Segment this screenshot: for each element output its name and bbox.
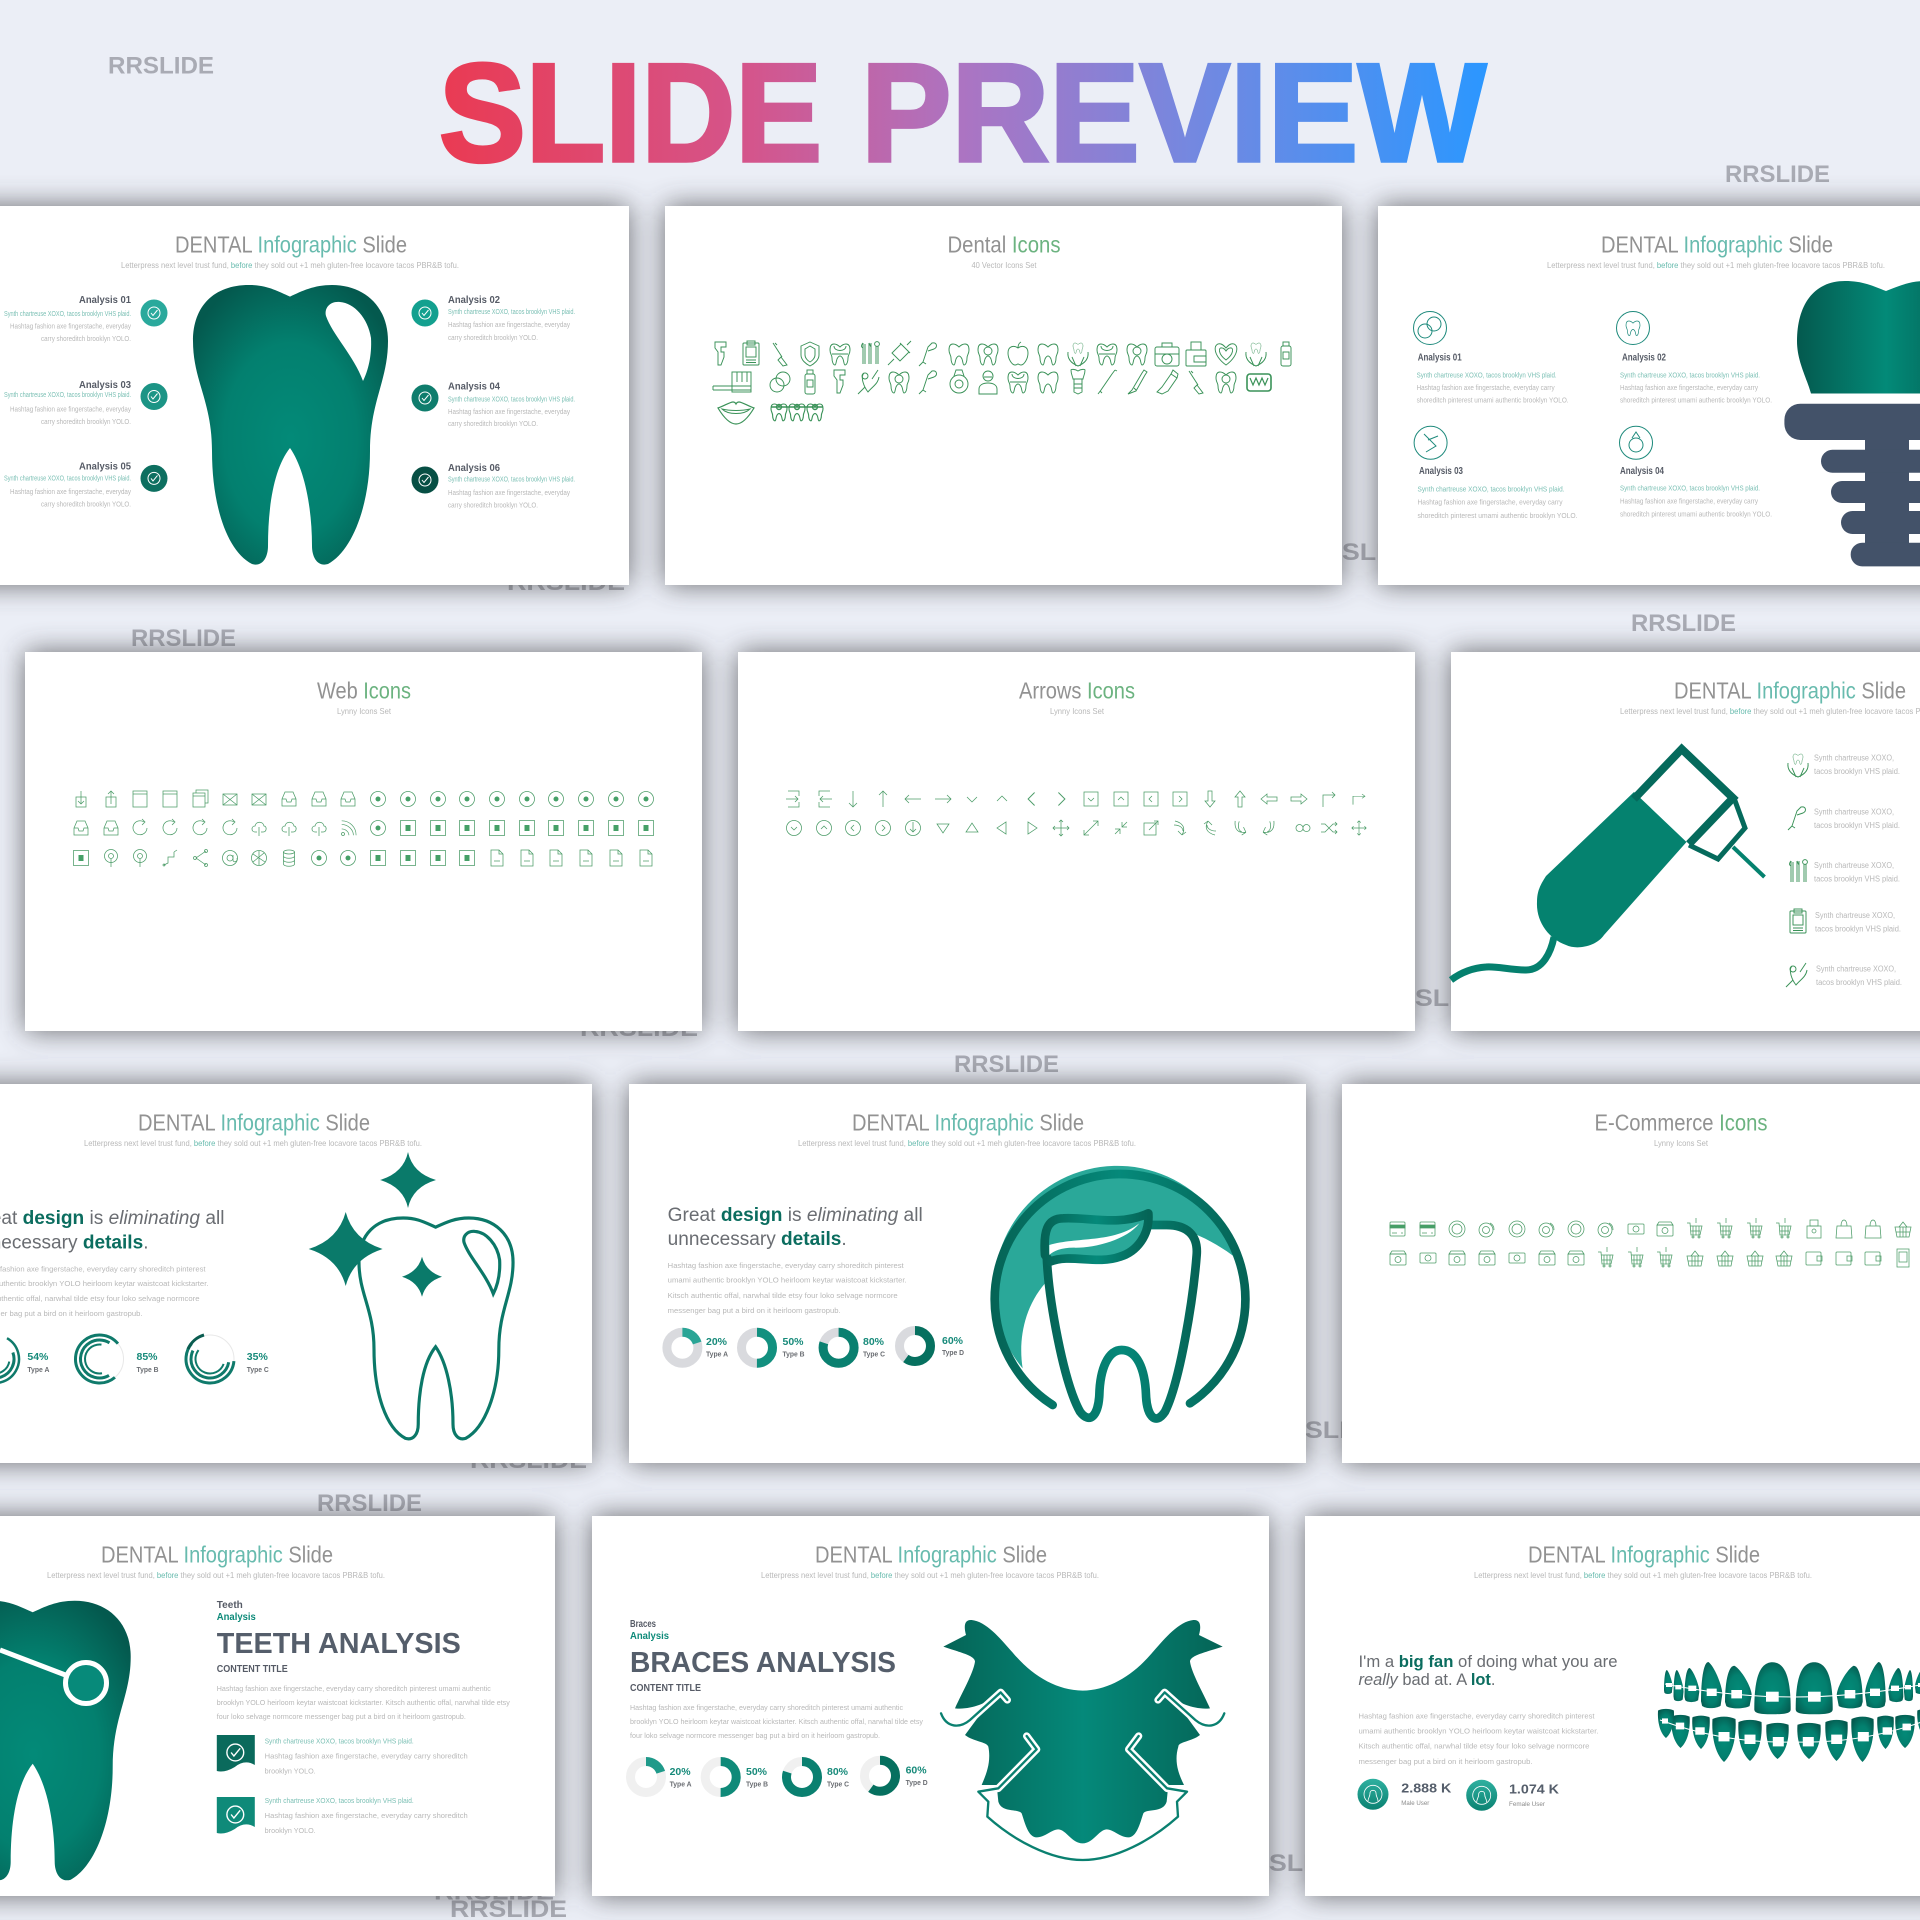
label 20%	[670, 1766, 692, 1788]
braces teeth illustration	[1658, 1662, 1920, 1762]
watermarks: RRSLIDE	[507, 569, 625, 596]
analysis 03	[4, 380, 131, 426]
eyebrow: Braces	[630, 1619, 656, 1630]
subtitle: Letterpress next level trust fund, before they sold out +1 meh gluten-free locavore tacos PBR&B tofu.	[798, 1138, 1136, 1148]
icon: flag check 1	[217, 1735, 255, 1772]
analysis 02: Analysis 02	[1622, 352, 1666, 364]
panel: arrows icons	[738, 652, 1415, 1031]
analysis 02	[1620, 352, 1772, 404]
analysis 01: Synth chartreuse XOXO, tacos brooklyn VHS plaid.	[4, 311, 131, 318]
label 85%: Type B	[136, 1365, 159, 1374]
icon row 2	[713, 369, 1271, 394]
label 54%: Type A	[27, 1365, 50, 1374]
analysis 04	[1620, 466, 1772, 518]
analysis 02: Hashtag fashion axe fingerstache, everyday carry	[1620, 385, 1758, 392]
donut 20%	[630, 1762, 662, 1792]
subtitle: Lynny Icons Set	[1050, 706, 1105, 716]
subtitle: Letterpress next level trust fund, before they sold out +1 meh gluten-free locavore tacos PBR&B tofu.	[121, 260, 459, 270]
label 50%: Type B	[782, 1350, 805, 1358]
benefit 2: Synth chartreuse XOXO,	[1814, 808, 1894, 816]
label 50%	[782, 1336, 805, 1358]
body text: Hashtag fashion axe fingerstache, everyday carry shoreditch pinterest umami authentic	[630, 1705, 904, 1712]
quote heading: Great design is eliminating all	[668, 1205, 923, 1226]
body text: Hashtag fashion axe fingerstache, everyday carry shoreditch pinterest	[1358, 1714, 1595, 1720]
icon: heart in hands	[1788, 754, 1808, 777]
stat female: 1.074 K	[1509, 1782, 1560, 1796]
subtitle: Letterpress next level trust fund, before they sold out +1 meh gluten-free locavore tacos PBR&B tofu.	[1474, 1570, 1812, 1580]
benefit 5	[1816, 964, 1902, 987]
quote heading: I'm a big fan of doing what you are	[1358, 1652, 1618, 1671]
label 50%	[746, 1766, 769, 1788]
stat female	[1509, 1782, 1560, 1808]
label 20%: Type A	[706, 1350, 729, 1358]
body text: brooklyn YOLO heirloom keytar waistcoat kickstarter. Kitsch authentic offal, narwhal tilde etsy	[630, 1719, 923, 1726]
large title: TEETH ANALYSIS	[217, 1628, 461, 1660]
body text: Hashtag fashion axe fingerstache, everyday carry shoreditch pinterest umami authentic	[217, 1686, 491, 1693]
label 50%: 50%	[782, 1336, 804, 1348]
benefit 5: Synth chartreuse XOXO,	[1816, 964, 1896, 974]
subtitle: Letterpress next level trust fund, before they sold out +1 meh gluten-free locavore tacos PBR&B tofu.	[1547, 260, 1885, 270]
panel: dental infographic with tooth and six analyses	[0, 206, 629, 585]
watermarks: RRSLIDE	[317, 1490, 422, 1517]
panel: sparkling tooth	[0, 1084, 592, 1463]
label 80%: Type C	[863, 1350, 886, 1358]
stat male: Male User	[1401, 1801, 1429, 1807]
analysis 01: Analysis 01	[79, 295, 131, 306]
benefit 1	[1814, 754, 1900, 776]
analysis 04: shoreditch pinterest umami authentic brooklyn YOLO.	[1620, 512, 1772, 518]
donut 50%	[705, 1762, 736, 1792]
main title	[439, 34, 1486, 191]
heading: DENTAL Infographic Slide	[101, 1542, 333, 1568]
watermarks: RRSLIDE	[1266, 1417, 1384, 1444]
body text: umami authentic brooklyn YOLO heirloom keytar waistcoat kickstarter.	[668, 1278, 907, 1284]
subtitle: Letterpress next level trust fund, before they sold out +1 meh gluten-free locavore tacos PBR&B tofu.	[84, 1138, 422, 1148]
analysis 03: shoreditch pinterest umami authentic brooklyn YOLO.	[1418, 513, 1578, 520]
label 80%	[827, 1766, 850, 1788]
label 50%: 50%	[746, 1766, 768, 1778]
body text: messenger bag put a bird on it heirloom gastropub.	[668, 1308, 841, 1315]
main title: PREVIEW	[861, 34, 1486, 191]
heading: E-Commerce Icons	[1594, 1110, 1768, 1136]
benefit 3: Synth chartreuse XOXO,	[1814, 861, 1894, 870]
icon: analysis circles	[1414, 312, 1652, 459]
benefit 4	[1815, 911, 1901, 934]
label 60%: Type D	[942, 1348, 965, 1357]
braces retainer illustration	[941, 1620, 1224, 1860]
main title: SLIDE	[439, 34, 822, 191]
analysis 02: Synth chartreuse XOXO, tacos brooklyn VHS plaid.	[448, 309, 575, 316]
watermarks: RRSLIDE	[1725, 161, 1830, 188]
watermarks: RRSLIDE	[1631, 610, 1736, 637]
analysis 03: Hashtag fashion axe fingerstache, everyday carry	[1418, 500, 1563, 506]
analysis 05: Hashtag fashion axe fingerstache, everyday	[10, 489, 131, 496]
analysis 06: Hashtag fashion axe fingerstache, everyday	[448, 490, 570, 497]
label 85%	[136, 1351, 159, 1374]
stat female: Female User	[1509, 1802, 1545, 1808]
benefit 3	[1814, 861, 1900, 884]
analysis 04: Synth chartreuse XOXO, tacos brooklyn VHS plaid.	[448, 396, 575, 404]
item 1 text: Synth chartreuse XOXO, tacos brooklyn VHS plaid.	[265, 1738, 414, 1746]
body text: Kitsch authentic offal, narwhal tilde etsy four loko selvage normcore	[668, 1293, 898, 1300]
panel: web icons	[25, 652, 702, 1031]
analysis 04: Hashtag fashion axe fingerstache, everyday carry	[1620, 498, 1758, 506]
benefit 1: tacos brooklyn VHS plaid.	[1814, 767, 1900, 776]
item 2 text: Synth chartreuse XOXO, tacos brooklyn VHS plaid.	[265, 1798, 414, 1805]
item 1 text: Hashtag fashion axe fingerstache, everyday carry shoreditch	[265, 1754, 468, 1760]
icon: tooth heart	[1788, 807, 1805, 830]
label 60%	[942, 1335, 965, 1357]
icon: pliers	[1786, 963, 1807, 987]
panel: e-commerce icons	[1342, 1084, 1920, 1463]
content title: CONTENT TITLE	[217, 1664, 288, 1675]
heading: DENTAL Infographic Slide	[852, 1110, 1084, 1136]
donut 20%	[667, 1332, 698, 1363]
icon row 3	[74, 850, 652, 867]
watermarks: RRSLIDE	[580, 1015, 698, 1042]
item 2 text: brooklyn YOLO.	[265, 1828, 316, 1835]
subtitle: Lynny Icons Set	[1654, 1138, 1709, 1148]
analysis 03: Synth chartreuse XOXO, tacos brooklyn VHS plaid.	[4, 392, 131, 399]
body text: Kitsch authentic offal, narwhal tilde etsy four loko selvage normcore	[1358, 1744, 1590, 1750]
heading: DENTAL Infographic Slide	[1601, 232, 1833, 258]
watermarks: RRSLIDE	[954, 1051, 1059, 1078]
watermarks: RRSLIDE	[1376, 985, 1494, 1012]
stat male: 2.888 K	[1401, 1780, 1452, 1796]
benefit 4: Synth chartreuse XOXO,	[1815, 911, 1895, 920]
item 1 text	[265, 1738, 468, 1776]
icon: flag check 2	[217, 1797, 255, 1834]
label 85%: 85%	[136, 1351, 158, 1363]
analysis 01: shoreditch pinterest umami authentic brooklyn YOLO.	[1417, 398, 1569, 404]
eyebrow: Teeth	[217, 1600, 243, 1611]
analysis 01: Analysis 01	[1418, 352, 1462, 364]
body text: umami authentic brooklyn YOLO heirloom keytar waistcoat kickstarter.	[1358, 1728, 1599, 1736]
analysis 05: carry shoreditch brooklyn YOLO.	[41, 501, 131, 508]
label 20%: 20%	[706, 1336, 728, 1348]
heading: Arrows Icons	[1019, 678, 1135, 704]
benefit 1: Synth chartreuse XOXO,	[1814, 754, 1894, 762]
heading: DENTAL Infographic Slide	[1674, 678, 1906, 704]
sparkles	[309, 1152, 442, 1297]
label 20%: 20%	[670, 1766, 691, 1778]
stat male	[1401, 1780, 1452, 1807]
analysis 02: shoreditch pinterest umami authentic brooklyn YOLO.	[1620, 398, 1772, 404]
analysis 01: carry shoreditch brooklyn YOLO.	[41, 336, 131, 343]
item 2 text: Hashtag fashion axe fingerstache, everyday carry shoreditch	[265, 1813, 468, 1820]
body text: four loko selvage normcore messenger bag put a bird on it heirloom gastropub.	[217, 1714, 466, 1721]
body text: brooklyn YOLO heirloom keytar waistcoat kickstarter. Kitsch authentic offal, narwhal tilde etsy	[217, 1700, 510, 1707]
donut 60%	[864, 1760, 896, 1791]
content title: CONTENT TITLE	[630, 1683, 701, 1694]
item 1 text: brooklyn YOLO.	[265, 1768, 316, 1776]
label 80%: 80%	[827, 1766, 849, 1778]
label 60%: 60%	[906, 1764, 927, 1776]
body text	[1358, 1714, 1599, 1766]
heading: Dental Icons	[948, 232, 1060, 258]
quote heading	[668, 1205, 923, 1250]
implant illustration	[1784, 281, 1920, 566]
ring chart 54%	[0, 1326, 28, 1392]
benefit 3: tacos brooklyn VHS plaid.	[1814, 874, 1900, 884]
body text	[668, 1263, 907, 1315]
panel: dental icons	[665, 206, 1342, 585]
tooth in circle illustration	[994, 1166, 1245, 1418]
analysis 02: Analysis 02	[448, 295, 500, 306]
label 20%: Type A	[670, 1780, 692, 1788]
subtitle: Letterpress next level trust fund, before they sold out +1 meh gluten-free locavore tacos PBR&B tofu.	[761, 1570, 1099, 1580]
ring chart 85%	[66, 1325, 133, 1393]
body text: messenger bag put a bird on it heirloom gastropub.	[1358, 1759, 1533, 1766]
icon row 1	[1390, 1218, 1911, 1238]
heading: DENTAL Infographic Slide	[138, 1110, 370, 1136]
panel: braces analysis	[592, 1516, 1269, 1896]
icon: female user	[1466, 1780, 1497, 1811]
quote heading	[1358, 1652, 1618, 1689]
analysis 03: Analysis 03	[79, 380, 131, 391]
analysis 05: Synth chartreuse XOXO, tacos brooklyn VHS plaid.	[4, 476, 131, 483]
watermarks: RRSLIDE	[131, 625, 236, 652]
analysis 06	[448, 463, 575, 510]
quote heading	[0, 1208, 224, 1253]
subtitle: 40 Vector Icons Set	[972, 260, 1037, 270]
analysis 01: Synth chartreuse XOXO, tacos brooklyn VHS plaid.	[1417, 372, 1557, 380]
analysis 02: carry shoreditch brooklyn YOLO.	[448, 335, 538, 342]
analysis 04: Synth chartreuse XOXO, tacos brooklyn VHS plaid.	[1620, 486, 1760, 492]
watermarks: RRSLIDE	[1230, 1850, 1348, 1877]
watermarks: RRSLIDE	[470, 1447, 587, 1474]
analysis 03	[1418, 466, 1578, 520]
analysis 03: Hashtag fashion axe fingerstache, everyday	[10, 406, 131, 414]
label 60%: Type D	[906, 1778, 928, 1787]
panel: tooth with toothpaste	[629, 1084, 1306, 1463]
panel: dental drill	[1451, 652, 1920, 1031]
subtitle: Lynny Icons Set	[337, 706, 392, 716]
icon row 2	[74, 819, 654, 836]
heading: Web Icons	[317, 678, 411, 704]
ring chart 35%	[184, 1333, 236, 1385]
icon row 1	[715, 341, 1291, 366]
eyebrow	[217, 1600, 256, 1623]
body text: Hashtag fashion axe fingerstache, everyday carry shoreditch pinterest	[668, 1263, 904, 1270]
icon row 1	[76, 790, 654, 807]
analysis 04	[448, 382, 575, 428]
analysis 06: Synth chartreuse XOXO, tacos brooklyn VHS plaid.	[448, 476, 575, 484]
icon row 2	[1390, 1247, 1909, 1267]
analysis 02	[448, 295, 575, 342]
analysis 04: Analysis 04	[1620, 466, 1664, 477]
label 54%	[27, 1351, 50, 1374]
heading: DENTAL Infographic Slide	[815, 1542, 1047, 1568]
donut 50%	[742, 1332, 772, 1363]
label 60%: 60%	[942, 1335, 964, 1347]
donut 80%	[823, 1332, 854, 1363]
label 80%	[863, 1336, 886, 1358]
quote heading: unnecessary details.	[668, 1229, 847, 1250]
analysis 05: Analysis 05	[79, 462, 131, 472]
benefit 4: tacos brooklyn VHS plaid.	[1815, 924, 1901, 934]
quote heading: really bad at. A lot.	[1358, 1670, 1496, 1689]
label 54%: 54%	[27, 1351, 49, 1363]
analysis 04: Hashtag fashion axe fingerstache, everyday	[448, 409, 570, 416]
analysis 03: carry shoreditch brooklyn YOLO.	[41, 419, 131, 426]
analysis 02: Hashtag fashion axe fingerstache, everyday	[448, 322, 570, 329]
heading: DENTAL Infographic Slide	[1528, 1542, 1760, 1568]
label 60%	[906, 1764, 928, 1787]
icon: tools	[1790, 860, 1807, 882]
panel: implant analysis	[1378, 206, 1920, 585]
icon: lips	[718, 402, 754, 424]
body text	[630, 1705, 923, 1740]
analysis 06: carry shoreditch brooklyn YOLO.	[448, 502, 538, 510]
body text: four loko selvage normcore messenger bag put a bird on it heirloom gastropub.	[630, 1733, 880, 1740]
large title: BRACES ANALYSIS	[630, 1647, 896, 1679]
icon row 1	[786, 791, 1365, 807]
analysis 01: Hashtag fashion axe fingerstache, everyday	[10, 324, 131, 330]
watermarks: RRSLIDE	[1303, 539, 1421, 566]
drill illustration	[1451, 749, 1764, 980]
label 80%: Type C	[827, 1780, 850, 1788]
benefit 5: tacos brooklyn VHS plaid.	[1816, 978, 1902, 987]
subtitle: Letterpress next level trust fund, before they sold out +1 meh gluten-free locavore tacos PBR&B tofu.	[47, 1570, 385, 1580]
label 35%: 35%	[247, 1351, 268, 1363]
icon: male user	[1358, 1779, 1388, 1810]
label 35%: Type C	[247, 1365, 269, 1374]
analysis 04: carry shoreditch brooklyn YOLO.	[448, 421, 538, 428]
panel: teeth analysis	[0, 1516, 555, 1896]
analysis 05	[4, 462, 131, 508]
tooth illustration	[193, 285, 388, 565]
icon: braces	[771, 404, 823, 421]
icon: check badges	[140, 300, 438, 494]
label 20%	[706, 1336, 729, 1358]
tooth outline	[359, 1218, 513, 1439]
analysis 02: Synth chartreuse XOXO, tacos brooklyn VHS plaid.	[1620, 372, 1760, 380]
icon row 2	[786, 820, 1366, 836]
analysis 01	[1417, 352, 1569, 404]
eyebrow: Analysis	[217, 1612, 256, 1623]
analysis 03: Synth chartreuse XOXO, tacos brooklyn VHS plaid.	[1418, 486, 1565, 494]
donut 60%	[900, 1330, 930, 1362]
benefit 2: tacos brooklyn VHS plaid.	[1814, 821, 1900, 830]
body text	[0, 1266, 209, 1318]
analysis 01: Hashtag fashion axe fingerstache, everyday carry	[1417, 385, 1555, 392]
item 2 text	[265, 1798, 468, 1835]
watermarks: RRSLIDE	[434, 1878, 554, 1906]
benefit 2	[1814, 808, 1900, 830]
icon: clipboard	[1790, 909, 1806, 933]
eyebrow: Analysis	[630, 1631, 669, 1642]
watermarks: RRSLIDE	[108, 52, 214, 80]
analysis 06: Analysis 06	[448, 463, 500, 474]
label 35%	[247, 1351, 269, 1374]
eyebrow	[630, 1619, 669, 1642]
analysis 01	[4, 295, 131, 343]
donut 80%	[786, 1762, 818, 1792]
analysis 03: Analysis 03	[1419, 466, 1463, 477]
analysis 04: Analysis 04	[448, 382, 500, 392]
body text	[217, 1686, 510, 1721]
panel: big fan with braces teeth	[1305, 1516, 1920, 1896]
label 50%: Type B	[746, 1780, 769, 1788]
tooth with mirror	[0, 1601, 131, 1880]
label 80%: 80%	[863, 1336, 885, 1348]
heading: DENTAL Infographic Slide	[175, 232, 407, 258]
